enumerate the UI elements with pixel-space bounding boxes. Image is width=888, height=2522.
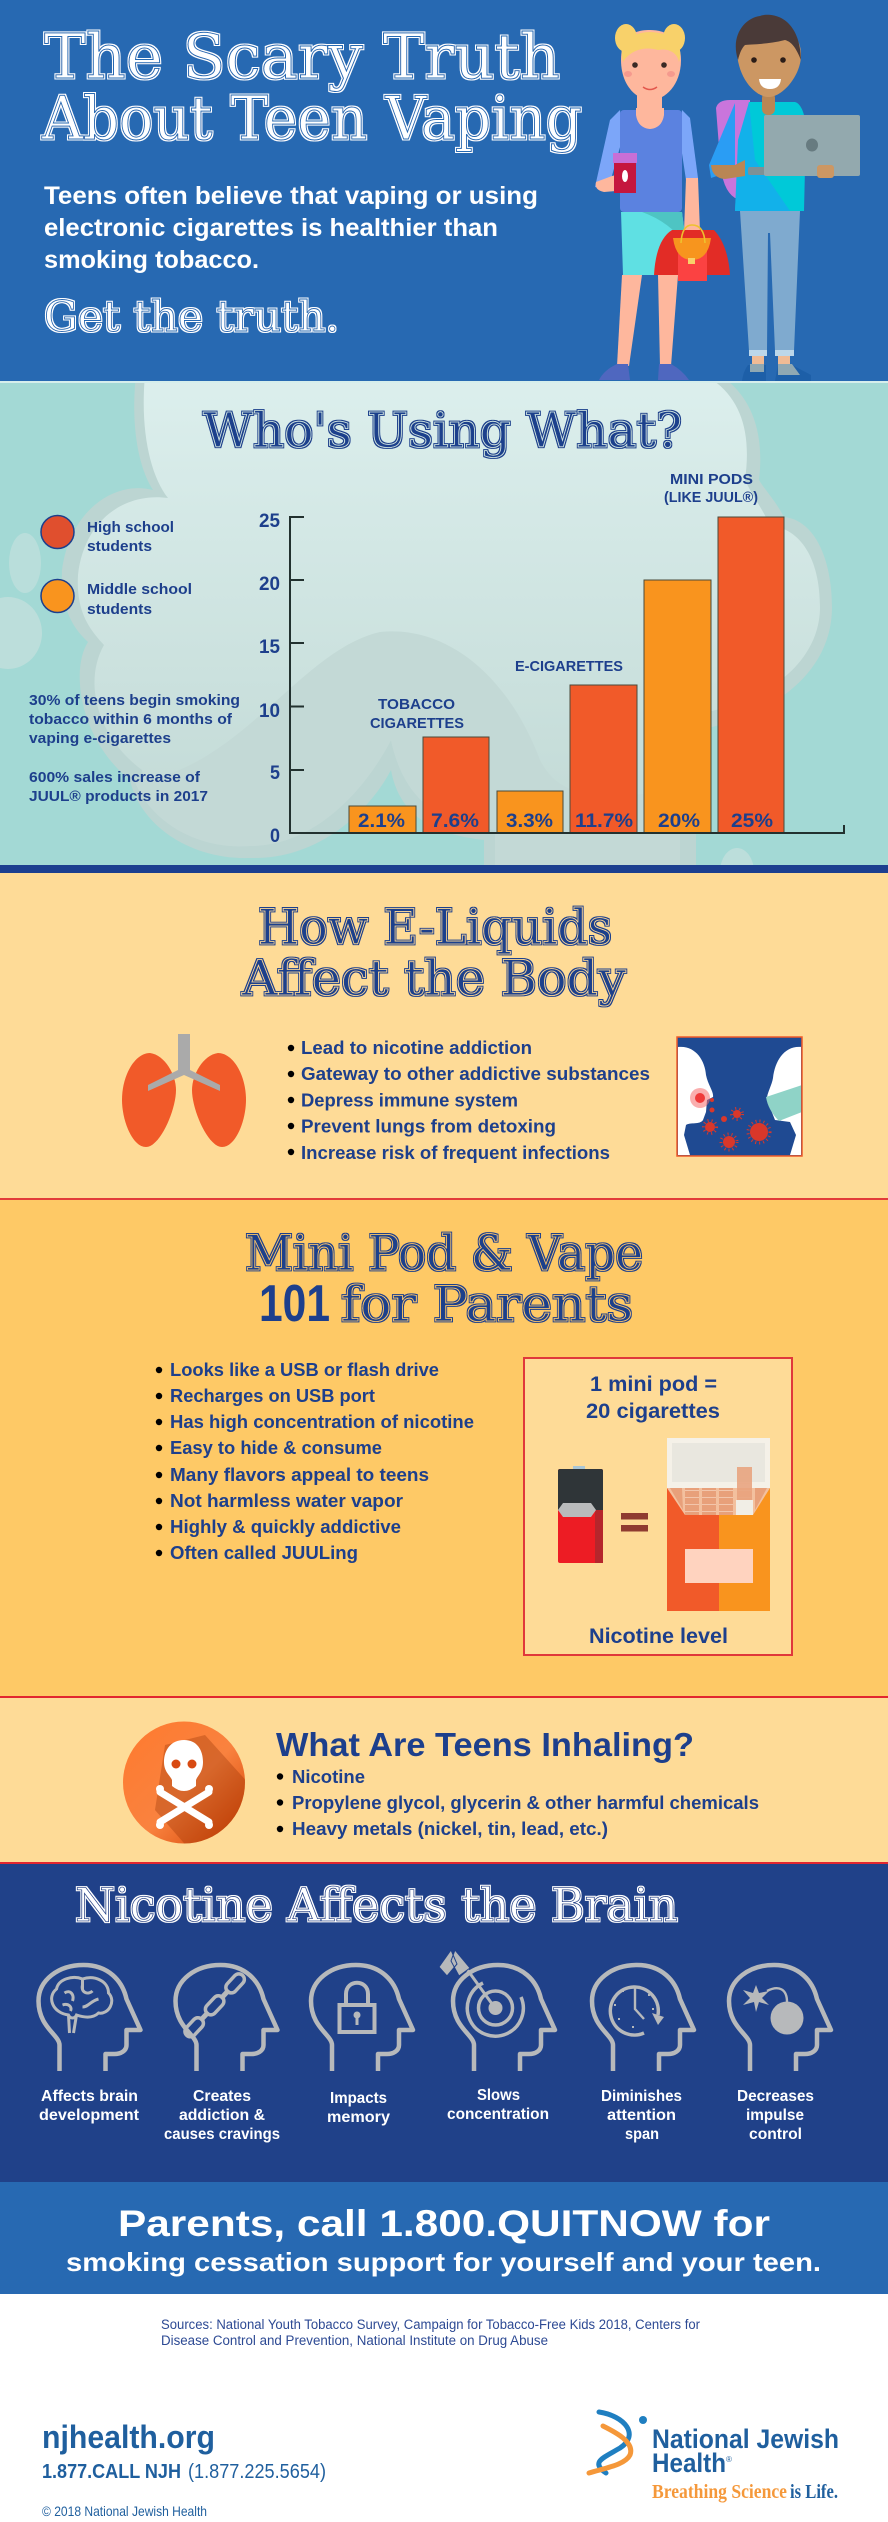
heading: What Are Teens Inhaling? [276,1726,694,1763]
side facts: vaping e-cigarettes [29,730,171,747]
bullet list [277,1767,759,1839]
title [41,20,582,154]
labels: addiction & [179,2107,265,2124]
bar chart: 11.7% [575,811,633,832]
labels [39,2087,814,2143]
labels: Diminishes [601,2088,682,2105]
bullet list: Looks like a USB or flash drive [170,1360,439,1380]
logo: National Jewish Health: National Jewish [652,2424,839,2454]
contact details: © 2018 National Jewish Health [42,2503,207,2519]
panel: nicotine affects the brain [0,1864,888,2182]
side facts [29,692,240,805]
bar chart: 10 [259,701,280,722]
icon: head with bomb [729,1965,831,2071]
intro text: electronic cigarettes is healthier than [44,214,498,242]
heading: Mini Pod & Vape [245,1225,643,1282]
bar chart: MINI PODS [670,471,753,488]
heading: for Parents [341,1276,633,1333]
side facts: JUUL® products in 2017 [29,788,208,805]
bullet list: Heavy metals (nickel, tin, lead, etc.) [292,1819,608,1839]
legend: Middle school [87,581,192,598]
callout: 1 mini pod equals 20 cigarettes: 20 cigarettes [586,1400,720,1423]
bar chart [259,471,844,847]
heading: How E-Liquids [258,899,612,956]
heading [241,899,626,1007]
heading [245,1225,643,1333]
icon: head with chain [176,1965,278,2071]
intro text: smoking tobacco. [44,246,259,274]
callout: 1 mini pod equals 20 cigarettes [524,1358,792,1655]
contact details: 1.877.CALL NJH [42,2461,181,2483]
logo: National Jewish Health: Health [652,2448,726,2478]
side facts: 30% of teens begin smoking [29,692,240,709]
labels: memory [327,2109,390,2126]
bullet list: Depress immune system [301,1090,518,1110]
panel: what are teens inhaling [0,1698,888,1864]
bar chart: 15 [259,637,280,658]
labels: control [749,2126,802,2143]
bullet list: Many flavors appeal to teens [170,1465,429,1485]
bullet list [156,1360,474,1563]
sources: Disease Control and Prevention, National Institute on Drug Abuse [161,2333,548,2348]
logo: National Jewish Health: ® [726,2455,732,2464]
illustration: teen boy [709,15,860,381]
panel: call to action: Parents, call 1.800.QUITNOW for [118,2203,770,2244]
labels: Affects brain [41,2088,138,2105]
bullet list: Highly & quickly addictive [170,1517,401,1537]
bullet list: Prevent lungs from detoxing [301,1117,556,1137]
sources: Sources: National Youth Tobacco Survey, Campaign for Tobacco-Free Kids 2018, Centers for [161,2317,700,2332]
intro text: Teens often believe that vaping or using [44,182,538,210]
legend: students [87,601,152,618]
icon: cigarette pack [667,1438,770,1611]
bar chart: (LIKE JUUL®) [664,489,758,506]
heading: 101 [259,1275,330,1333]
labels: span [625,2126,659,2143]
icon: helix [589,2412,647,2473]
heading: Nicotine Affects the Brain [75,1878,678,1932]
bullet list: Lead to nicotine addiction [301,1038,532,1058]
panel: who's using what [0,375,888,896]
labels: attention [607,2107,676,2124]
side facts: tobacco within 6 months of [29,711,233,728]
subheading: get the truth: Get the truth. [44,292,339,341]
bar chart: TOBACCO [378,696,455,713]
bullet list: Often called JUULing [170,1543,358,1563]
icon: skull and crossbones [123,1722,250,1850]
labels: Impacts [330,2090,387,2107]
illustration: virus transmission [677,1037,802,1156]
bullet list: Gateway to other addictive substances [301,1064,650,1084]
icon: head with padlock [311,1965,413,2071]
legend: High school [87,519,174,536]
panel: call to action [0,2182,888,2294]
smoke cloud background [0,375,832,896]
contact details: njhealth.org [42,2419,215,2455]
title: The Scary Truth [44,20,560,93]
bullet list [288,1038,650,1163]
labels: concentration [447,2106,549,2123]
legend [41,516,192,618]
icon: head with brain [38,1965,140,2071]
bullet list: Not harmless water vapor [170,1491,403,1511]
labels: Decreases [737,2088,814,2105]
bullet list: Nicotine [292,1767,365,1787]
logo: National Jewish Health: is Life. [790,2481,838,2503]
logo: National Jewish Health [589,2412,839,2503]
bar chart: 3.3% [506,811,553,832]
bar chart: 7.6% [431,811,479,832]
bullet list: Has high concentration of nicotine [170,1412,474,1432]
bar chart: 5 [270,763,280,784]
labels: causes cravings [164,2126,280,2143]
heading: Affect the Body [241,950,626,1007]
logo: National Jewish Health: Breathing Science [652,2481,787,2503]
icon: head with target and arrow [439,1950,555,2071]
title: About Teen Vaping [41,84,582,154]
heading: Who's Using What? [203,403,682,459]
panel: call to action: smoking cessation support for yourself and your teen. [66,2247,821,2277]
panel: how e-liquids affect the body [0,873,888,1200]
intro text [44,182,538,274]
bar chart: 20% [658,811,700,832]
bar chart: 25 [259,511,280,532]
bullet list: Propylene glycol, glycerin & other harmful chemicals [292,1793,759,1813]
bar chart: 25% [731,811,773,832]
contact details: (1.877.225.5654) [188,2461,326,2483]
bullet list: Recharges on USB port [170,1386,375,1406]
callout: 1 mini pod equals 20 cigarettes: 1 mini pod = [590,1373,717,1396]
bar chart: 20 [259,574,280,595]
equals sign [621,1513,648,1532]
panel: header [0,0,888,381]
panel: mini pod and vape 101 [0,1200,888,1698]
labels: development [39,2107,139,2124]
labels: Slows [477,2087,520,2104]
contact details [42,2419,326,2519]
icon: lungs [122,1034,246,1147]
bullet list: Easy to hide & consume [170,1438,382,1458]
side facts: 600% sales increase of [29,769,201,786]
labels: Creates [193,2088,251,2105]
illustration: teen girl [595,24,730,380]
bar chart: E-CIGARETTES [515,658,623,675]
legend: students [87,538,152,555]
bar chart: 2.1% [358,811,405,832]
bar chart: 0 [270,826,280,847]
labels: impulse [746,2107,804,2124]
bullet list: Increase risk of frequent infections [301,1143,610,1163]
icon: head with clock [592,1965,694,2071]
callout: 1 mini pod equals 20 cigarettes: Nicotine level [589,1625,728,1648]
icon: mini pod [558,1466,603,1563]
sources [161,2317,700,2348]
bar chart: CIGARETTES [370,715,464,732]
